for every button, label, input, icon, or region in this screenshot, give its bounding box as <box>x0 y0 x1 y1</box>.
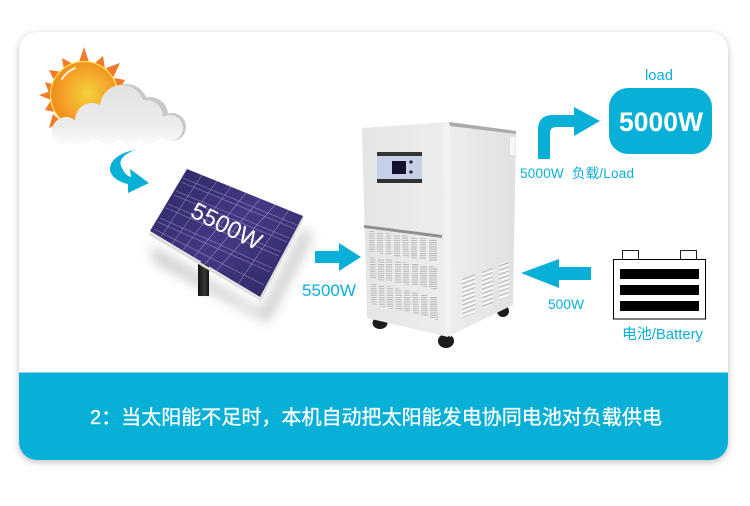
icon: sun behind cloud <box>39 47 186 145</box>
icon: battery <box>614 250 706 319</box>
side vents <box>462 261 509 318</box>
label: 5000W load: 5000W 负载/Load <box>520 166 634 181</box>
side label <box>510 137 515 155</box>
cabinet corner post <box>443 122 451 337</box>
caption text: 2：当太阳能不足时，本机自动把太阳能发电协同电池对负载供电 <box>90 406 662 429</box>
load value: 5000W <box>619 107 703 137</box>
label: load: load <box>645 68 673 84</box>
cloud <box>52 84 186 145</box>
panel cells <box>150 169 303 297</box>
caption band <box>19 372 728 460</box>
arrow: battery to inverter <box>521 259 591 288</box>
label: battery: 电池/Battery <box>622 326 704 343</box>
sun rays <box>39 47 125 128</box>
arrow: inverter to load <box>538 107 600 159</box>
door seam <box>364 225 442 238</box>
display panel <box>377 152 422 183</box>
label: 5500W: 5500W <box>302 282 356 300</box>
load box <box>609 88 712 154</box>
cabinet front <box>362 122 448 337</box>
front vents <box>369 230 438 320</box>
panel shadow <box>150 228 312 322</box>
pole <box>198 262 209 296</box>
panel label: 5500W <box>186 197 267 256</box>
wheels <box>372 317 388 329</box>
cabinet side <box>450 124 516 335</box>
arrow: curved, sun to solar panel <box>110 150 149 193</box>
panel frame <box>149 216 304 301</box>
solar panel <box>149 169 312 322</box>
label: 500W: 500W <box>548 297 584 312</box>
inverter cabinet <box>362 122 516 348</box>
arrow: solar panel to inverter <box>315 243 361 271</box>
